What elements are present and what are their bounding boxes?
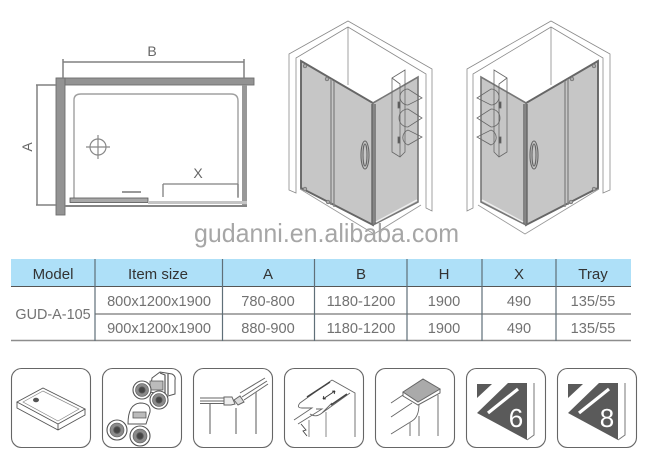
row 900: 900x1200x1900 [107, 321, 211, 337]
icon: 8mm glass: 8 [600, 403, 614, 433]
side glass panel [373, 77, 418, 225]
header labels: Item size [128, 266, 188, 283]
dimension X [163, 165, 238, 197]
row 800: 800x1200x1900 [107, 294, 211, 310]
row 900: 1900 [428, 321, 460, 337]
bottom track [482, 200, 523, 222]
row 800: 780-800 [241, 294, 295, 310]
lower roller set [107, 403, 150, 446]
row 900: 490 [507, 321, 531, 337]
icon: door rollers [102, 368, 182, 448]
shower cabin left view [289, 21, 432, 234]
drain symbol [86, 135, 110, 159]
rollers [569, 64, 596, 204]
shower cabin right view [467, 21, 610, 234]
header labels: X [514, 266, 524, 283]
door stile [565, 79, 568, 207]
row 800: 1180-1200 [327, 294, 395, 310]
icon: 8mm glass [558, 368, 636, 448]
icon: 6mm glass: 6 [509, 403, 523, 433]
short glass panel [481, 77, 526, 225]
header labels: B [356, 266, 366, 283]
dimension X: X [193, 165, 203, 181]
corner post [372, 104, 375, 225]
row 900: 1180-1200 [327, 321, 395, 337]
row 900: 135/55 [571, 321, 615, 337]
rollers [303, 64, 330, 204]
header labels: A [263, 266, 273, 283]
dimension A [19, 85, 57, 205]
room corner [347, 27, 349, 85]
room walls [289, 21, 432, 211]
header labels [33, 266, 608, 283]
row 900 [107, 321, 615, 337]
door stile [331, 79, 334, 207]
row 800: 1900 [428, 294, 460, 310]
specification table [11, 259, 631, 341]
header labels: H [439, 266, 449, 283]
icon: hinged corner joint [194, 368, 272, 448]
door handle [530, 141, 538, 169]
icon: top cap [376, 368, 454, 448]
model cell: GUD-A-105 [15, 307, 91, 323]
door handle [361, 141, 369, 169]
top wall profile [57, 78, 254, 85]
icon: 6mm glass [466, 368, 546, 448]
tray base [300, 189, 421, 234]
dimension B [63, 43, 244, 78]
upper roller set [133, 372, 175, 409]
adjustment bracket [477, 70, 507, 157]
bottom sliding doors [65, 191, 247, 207]
tray base [478, 189, 599, 234]
dimension B: B [147, 43, 157, 59]
adjustment bracket [392, 70, 422, 157]
left wall profile [56, 78, 65, 215]
wide glass panel [526, 61, 598, 225]
corner post [524, 104, 527, 225]
right profile [242, 85, 247, 207]
table header band [11, 259, 631, 286]
header labels: Model [33, 266, 73, 283]
row 800: 490 [507, 294, 531, 310]
header labels: Tray [578, 266, 608, 283]
plan drawing [19, 43, 254, 215]
tray outline [74, 94, 238, 198]
front glass panel [301, 61, 373, 225]
table rules [11, 259, 631, 341]
room corner [550, 27, 552, 85]
row 800 [107, 294, 615, 310]
bottom track [376, 200, 417, 222]
icon: wall profile adjustment [284, 368, 364, 448]
watermark: gudanni.en.alibaba.com [194, 218, 459, 248]
icon: shower tray [12, 368, 90, 448]
row 800: 135/55 [571, 294, 615, 310]
room walls [467, 21, 610, 211]
dimension A: A [19, 142, 35, 152]
row 900: 880-900 [241, 321, 295, 337]
